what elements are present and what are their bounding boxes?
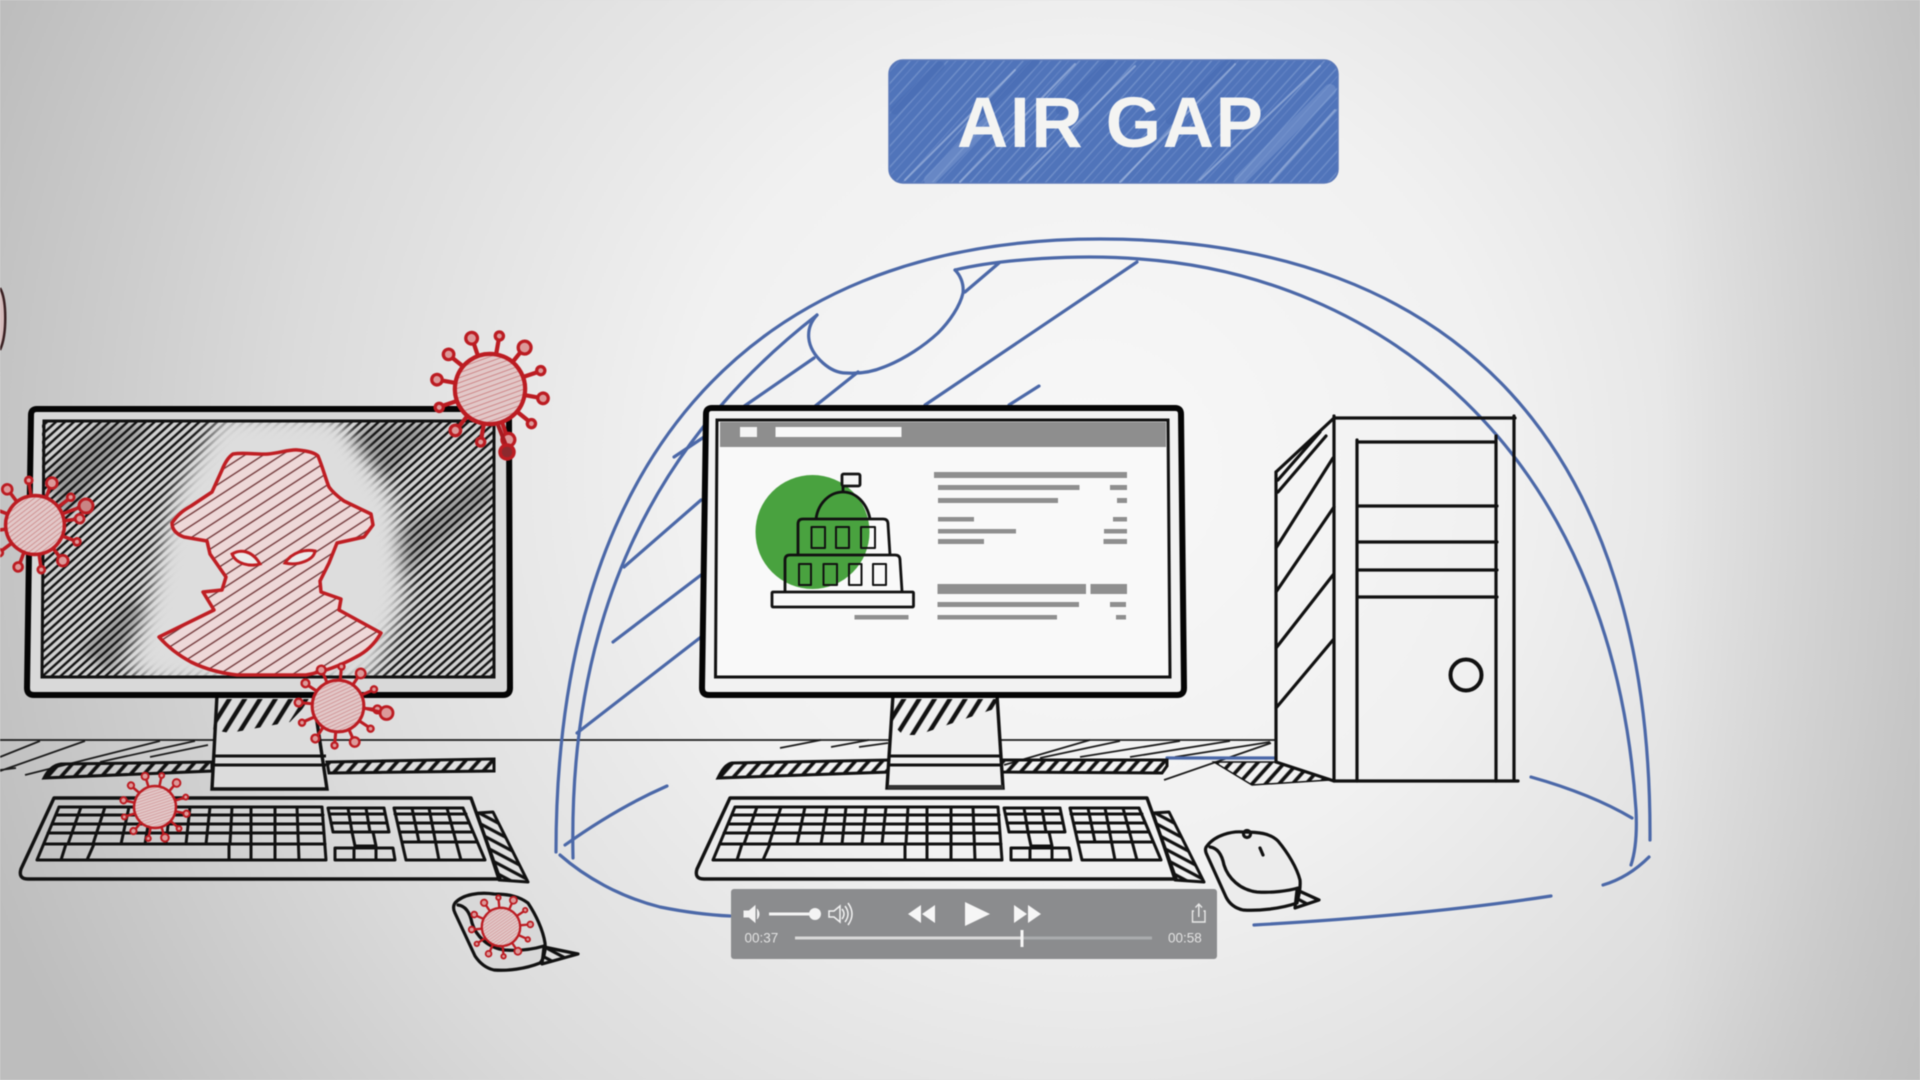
virus at left of monitor xyxy=(0,470,93,580)
right desk shadow band xyxy=(718,760,1167,778)
right keyboard xyxy=(696,798,1204,882)
monitor stand xyxy=(212,695,327,789)
tower side hatching xyxy=(1276,418,1334,781)
monitor screen xyxy=(716,420,1170,677)
monitor screen hatching xyxy=(42,421,494,677)
icon: green circle behind building xyxy=(756,475,870,589)
right mouse xyxy=(1206,830,1319,910)
browser header bar xyxy=(720,422,1166,447)
icon: volume low xyxy=(744,906,759,922)
left desk shadow band xyxy=(44,759,494,778)
virus on mouse xyxy=(466,893,536,961)
dome inner arc left xyxy=(573,315,817,858)
tower computer xyxy=(1214,416,1518,785)
volume slider xyxy=(769,908,821,920)
floor horizon and hatching xyxy=(0,740,1277,780)
virus on top right of monitor xyxy=(422,322,558,459)
icon: rewind xyxy=(908,905,935,923)
dome inner arc right xyxy=(955,257,1636,865)
hacker silhouette xyxy=(159,450,381,675)
dome base curves xyxy=(560,855,730,916)
monitor bezel xyxy=(27,409,510,695)
icon: play xyxy=(965,902,990,926)
tower inner panel xyxy=(1357,436,1497,781)
progress bar xyxy=(795,930,1152,947)
dome reflection lines xyxy=(577,262,1137,733)
icon: share xyxy=(1192,904,1205,922)
left monitor: infected computer xyxy=(27,409,510,789)
right monitor: secure computer xyxy=(702,408,1184,788)
video player controls xyxy=(731,889,1217,959)
dome: air gap protection xyxy=(556,239,1650,925)
partial virus at left edge xyxy=(0,288,5,350)
virus on keyboard xyxy=(113,766,197,848)
icon: government building xyxy=(772,474,914,607)
left mouse xyxy=(454,893,578,970)
total time: 00:58 xyxy=(1168,930,1202,946)
dome highlight blob xyxy=(809,270,963,373)
monitor bezel xyxy=(702,408,1184,695)
elapsed time: 00:37 xyxy=(744,930,778,946)
icon: volume high xyxy=(829,903,852,925)
title label: AIR GAP: AIR GAP xyxy=(957,84,1263,163)
left keyboard xyxy=(20,798,528,882)
title label: AIR GAP xyxy=(889,60,1338,183)
document text lines xyxy=(854,472,1127,620)
dome outer arc xyxy=(556,239,1650,852)
hacker eyes xyxy=(232,551,260,565)
tower front xyxy=(1334,416,1518,781)
tower power button xyxy=(1450,660,1482,690)
virus at monitor stand xyxy=(291,660,393,752)
icon: fast forward xyxy=(1014,905,1041,923)
tower floor shadow xyxy=(1214,762,1330,785)
monitor stand xyxy=(887,695,1003,788)
